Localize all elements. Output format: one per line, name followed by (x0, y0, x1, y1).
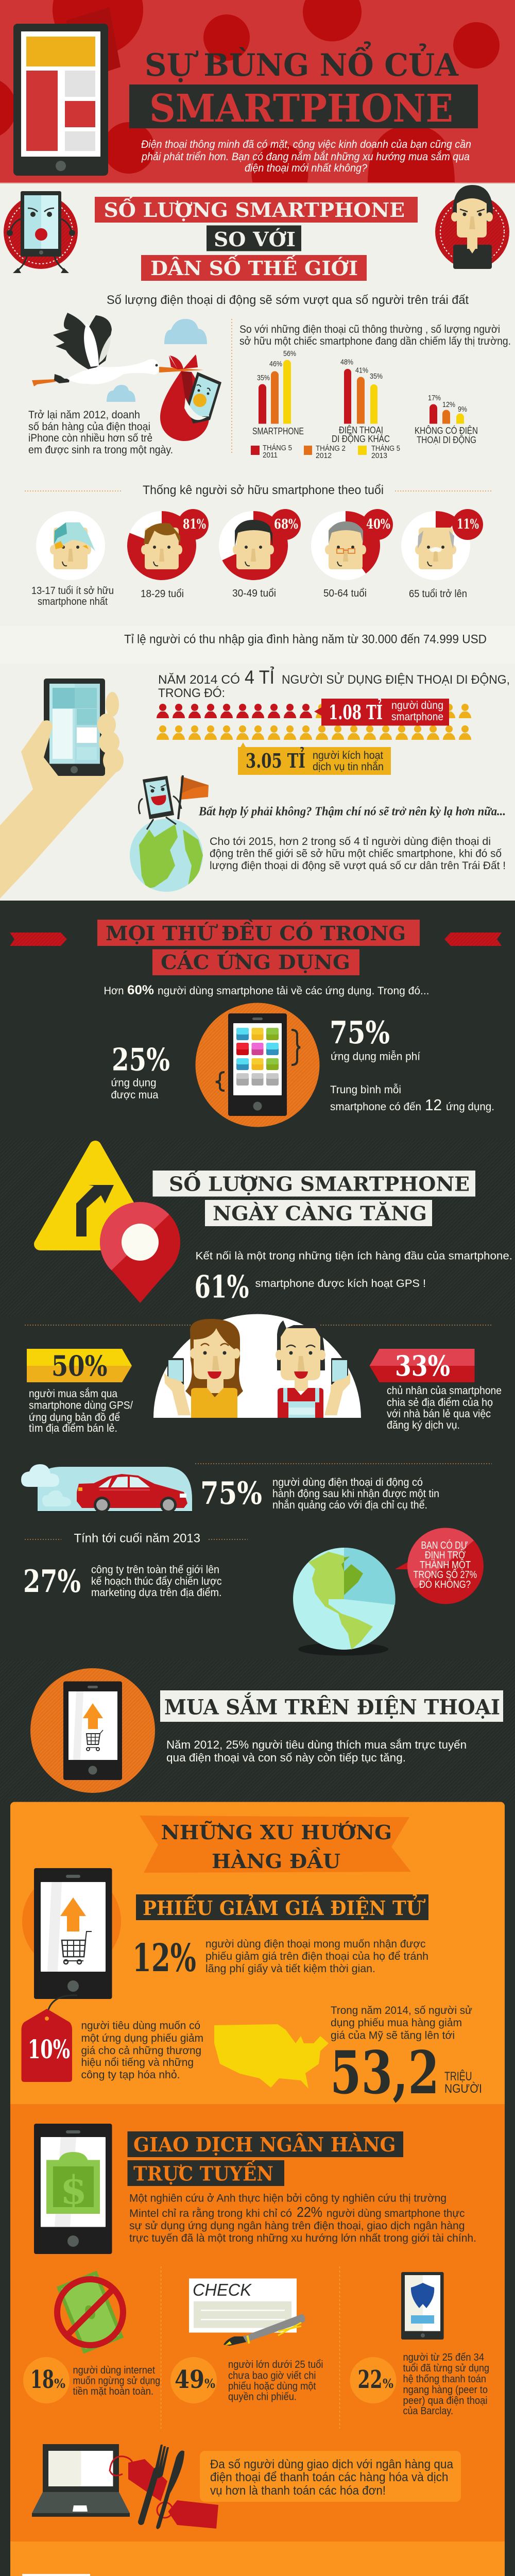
stat: 18 percent internet: 18 (30, 2365, 54, 2394)
stat: 22 percent peer to peer: tuổi đã từng sử dụng (403, 2363, 489, 2374)
icon: cheque and pen: CHECK (193, 2280, 252, 2299)
stat: 53.2 million: 53,2 (330, 2038, 439, 2107)
callout: pay for goods: Đa số người dùng giao dịch với ngân hàng qua (210, 2458, 454, 2471)
callout: 1.08 billion (314, 699, 449, 725)
age 65+: 11% (401, 509, 483, 600)
stat: 25 percent: 25% (112, 1042, 170, 1078)
heading: online banking: GIAO DỊCH NGÂN HÀNG (133, 2133, 396, 2156)
age 18-29: 81% (127, 509, 209, 600)
text: mintel study: 22% (297, 2204, 322, 2220)
bar chart: phone ownership: 12% (442, 400, 455, 409)
stat: 12 percent: lãng phí giấy và tiết kiệm thời gian. (205, 1963, 375, 1975)
stat: 12 percent: người dùng điện thoại mong muốn nhận được (205, 1938, 425, 1950)
banner: top trends: HÀNG ĐẦU (212, 1848, 340, 1873)
icon: bag with baby phone (160, 354, 221, 441)
text: gps shoppers: tìm địa điểm bán lẻ. (29, 1422, 117, 1434)
icon: phone mascot on globe (130, 775, 209, 892)
heading: các ứng dụng: CÁC ỨNG DỤNG (161, 951, 350, 974)
flag: 33 percent (370, 1349, 475, 1382)
age 30-49: 68%: 68% (274, 517, 298, 532)
speech bubble: BẠN CÓ DỰ (421, 1539, 468, 1551)
icon: cloud small (107, 385, 135, 402)
bar chart: phone ownership: 48% (340, 358, 353, 367)
icon: hero phone (13, 24, 108, 176)
intro text: điện thoại mới nhất không? (245, 162, 367, 174)
flag: 50 percent: 50% (52, 1349, 107, 1382)
pictogram: people rows (157, 704, 471, 740)
panel: top trends (10, 1802, 505, 2576)
stat: 75 percent act (200, 1476, 439, 1512)
label: 50-64: 50-64 tuổi (323, 588, 367, 599)
text: coupon app: người tiêu dùng muốn có (81, 2020, 200, 2032)
text: mintel study: Một nghiên cứu ở Anh thực hiện bởi công ty nghiên cứu thị trường (129, 2193, 447, 2205)
title: SỰ BÙNG NỔ CỦA (145, 41, 459, 83)
text: 60 percent (104, 983, 430, 997)
heading: số lượng smartphone: SỐ LƯỢNG SMARTPHONE (104, 196, 405, 222)
panel: apps (10, 920, 502, 1127)
text: 2012 shopping: Năm 2012, 25% người tiêu dùng thích mua sắm trực tuyến (166, 1738, 467, 1751)
icon: cheque and pen (189, 2278, 305, 2346)
stat: 75 percent act: người dùng điện thoại di động có (272, 1477, 423, 1488)
text: 2014 coupon users: giá của Mỹ sẽ tăng lên tới (331, 2030, 455, 2041)
text: coupon app: một ứng dụng phiếu giảm (81, 2032, 203, 2044)
stat: 27 percent: 27% (23, 1564, 81, 1600)
text: location sharers: với nhà bán lẻ qua việc (387, 1408, 491, 1420)
stat: 61 percent: smartphone được kích hoạt GPS ! (255, 1278, 426, 1290)
icon: price tag 10 percent (22, 2009, 72, 2082)
text: 2012 shopping: qua điện thoại và con số này còn tiếp tục tăng. (166, 1751, 406, 1764)
icon: qr phone with card (22, 2574, 140, 2576)
flag: 33 percent: 33% (395, 1349, 450, 1382)
stat: 49 percent cheques: 49 (175, 2365, 204, 2394)
text: coupon app: công ty tạp hóa nhỏ. (81, 2069, 180, 2081)
text: mintel study: trực tuyến đã là một trong những xu hướng lớn nhất trong giới tài chính. (129, 2232, 476, 2244)
stat: 18 percent internet (23, 2357, 160, 2403)
stat: 22 percent peer to peer: ngang hàng (peer to (403, 2384, 488, 2396)
banner: top trends (140, 1816, 411, 1873)
heading: số lượng smartphone: SỐ LƯỢNG SMARTPHONE (169, 1170, 470, 1195)
text: mintel study: Mintel chỉ ra rằng trong khi chỉ có (129, 2208, 292, 2219)
text: iPhone vs births (28, 409, 173, 456)
text: 2015 paragraph: lượng điện thoại di động sẽ vượt quá số cư dân trên Trái Đất ! (210, 860, 506, 872)
icon: stork (32, 313, 203, 386)
stat: 75 percent act: nhắn quảng cáo với địa chỉ cụ thể. (272, 1499, 427, 1511)
age 18-29: 81%: 81% (183, 517, 206, 532)
callout: 1.08 billion: người dùng (391, 700, 443, 711)
text: smartphones taking over: So với những điện thoại cũ thông thường , số lượng người (239, 324, 500, 335)
stat: 25 percent: được mua (111, 1089, 159, 1101)
heading: mọi thứ: MỌI THỨ ĐỀU CÓ TRONG (106, 920, 406, 945)
stat: 18 percent internet: người dùng internet (73, 2365, 155, 2376)
text: 2015 paragraph: Cho tới 2015, hơn 2 trong số 4 tỉ người dùng điện thoại di (210, 836, 491, 848)
stat: 22 percent peer to peer: % (383, 2376, 393, 2391)
callout: 1.08 billion: smartphone (391, 711, 443, 723)
text: iPhone vs births: Trở lại năm 2012, doanh (28, 409, 140, 421)
stat: 25 percent: ứng dụng (111, 1077, 157, 1089)
bar chart: phone ownership: ĐIỆN THOẠI (339, 425, 383, 435)
stat: 22 percent peer to peer: hệ thống thanh toán (403, 2374, 486, 2385)
text: 4 billion heading: NĂM 2014 CÓ (158, 673, 240, 687)
text: odd callout: Bất hợp lý phải không? Thậm chí nó sẽ trở nên kỳ lạ hơn nữa... (198, 805, 506, 818)
bar chart: phone ownership: KHÔNG CÓ ĐIỆN (415, 425, 478, 436)
subheading: mobile phones vs people: Số lượng điện thoại di động sẽ sớm vượt qua số người trên trái đất (107, 293, 469, 307)
icon: cloud large (164, 319, 207, 344)
label: 18-29: 18-29 tuổi (141, 588, 184, 600)
text: iPhone vs births: em được sinh ra trong một ngày. (28, 444, 173, 456)
subheading: ownership by age: Thống kê người sở hữu smartphone theo tuổi (143, 483, 384, 497)
icon: banking phone: $ (60, 2167, 87, 2213)
text: 12 apps: ứng dụng. (446, 1101, 494, 1113)
illustration: car (21, 1464, 192, 1513)
icon: USA map (214, 2024, 329, 2089)
stat: 75 percent (330, 1015, 420, 1062)
text: location sharers (387, 1385, 502, 1431)
bar chart: phone ownership: 9% (458, 405, 467, 414)
stat: 22 percent peer to peer (350, 2352, 489, 2417)
ribbon left (10, 933, 67, 946)
stat: 49 percent cheques (170, 2357, 323, 2403)
icon: road sign (40, 1147, 150, 1244)
label: 13-17: 13-17 tuổi ít sở hữu (31, 585, 114, 597)
stat: 75 percent: ứng dụng miễn phí (331, 1051, 420, 1062)
text: 2014 coupon users: dụng phiếu mua hàng giảm (331, 2017, 462, 2029)
icon: angry phone mascot (4, 191, 78, 273)
text: gps shoppers (29, 1388, 133, 1434)
stat: 75 percent act: hành động sau khi nhận được một tin (272, 1488, 439, 1500)
banner: top trends: NHỮNG XU HƯỚNG (161, 1821, 392, 1844)
text: location sharers: chủ nhân của smartphone (387, 1385, 502, 1397)
bar chart: phone ownership: SMARTPHONE (252, 426, 304, 436)
speech bubble: TRONG SỐ 27% (413, 1568, 477, 1581)
icon: phone with apps (196, 1003, 319, 1127)
subheading: end of 2013: Tính tới cuối năm 2013 (74, 1532, 200, 1546)
panel: mobile shopping (0, 1659, 515, 1802)
stat: 12 percent (132, 1936, 428, 1980)
stat: 22 percent peer to peer: người từ 25 đến 34 (403, 2352, 484, 2363)
icon: hand holding phone (0, 679, 124, 899)
stat: 22 percent peer to peer: peer) qua điện thoại (403, 2395, 487, 2406)
heading: so với: SO VỚI (214, 228, 296, 251)
stat: 75 percent: 75% (330, 1015, 390, 1051)
stat: 27 percent: marketing dựa trên địa điểm. (91, 1587, 221, 1599)
stat: 49 percent cheques: % (204, 2376, 215, 2391)
stat: 18 percent internet: % (54, 2376, 65, 2391)
heading: mua sắm: MUA SẮM TRÊN ĐIỆN THOẠI (164, 1693, 500, 1720)
label: 13-17 (31, 585, 114, 607)
text: 12 apps: Trung bình mỗi (330, 1084, 401, 1096)
text: mintel study (129, 2193, 476, 2244)
text: 2014 coupon users: Trong năm 2014, số người sử (331, 2005, 472, 2016)
stat: 22 percent peer to peer: của Barclay. (403, 2405, 453, 2417)
text: 2015 paragraph (210, 836, 506, 872)
age 13-17 (31, 511, 114, 607)
stat: 18 percent internet: tiền mặt hoàn toàn. (73, 2386, 153, 2397)
icon: laptop with tags and cutlery (32, 2444, 218, 2529)
text: gps shoppers: người mua sắm qua (29, 1388, 117, 1400)
text: 2014 coupon users (331, 2005, 472, 2041)
icon: phone with cart (30, 1668, 155, 1793)
callout: 3.05 billion: người kích hoạt (313, 750, 383, 761)
text: 4 billion heading: NGƯỜI SỬ DỤNG ĐIỆN THOẠI DI ĐỘNG, (282, 672, 510, 687)
age 50-64: 40% (311, 509, 393, 599)
text: 12 apps: smartphone có đến (330, 1101, 421, 1113)
stat: 49 percent cheques: phiếu hoặc dùng một (228, 2381, 316, 2392)
text: coupon app: hiệu nổi tiếng và những (81, 2057, 194, 2069)
text: 60 percent: 60% (127, 983, 154, 997)
stat: 12 percent: phiếu giảm giá trên điện thoại của họ để tránh (205, 1951, 428, 1962)
text: coupon app (81, 2020, 203, 2081)
stat: 61 percent: 61% (195, 1269, 249, 1306)
callout: pay for goods: điện thoại để thanh toán các hàng hóa và dịch (210, 2470, 448, 2484)
text: gps shoppers: smartphone dùng GPS/ (29, 1400, 133, 1412)
flag: 50 percent (27, 1349, 132, 1382)
heading: online banking: TRỰC TUYẾN (133, 2160, 273, 2185)
speech bubble: ĐỊNH TRỞ (425, 1549, 466, 1561)
heading: online banking (128, 2131, 403, 2186)
label: 13-17: smartphone nhất (38, 596, 108, 607)
icon: no cash (57, 2270, 124, 2354)
speech bubble: THÀNH MỘT (420, 1559, 471, 1571)
stat: 61 percent (195, 1269, 426, 1306)
text: connectivity: Kết nối là một trong những tiện ích hàng đầu của smartphone. (196, 1250, 512, 1262)
panel: hero (0, 0, 515, 183)
bar chart: phone ownership: 41% (355, 366, 368, 375)
chart legend (251, 444, 400, 460)
icon: barclays tablet (401, 2272, 444, 2340)
chart legend: THÁNG 2 (316, 444, 346, 453)
text: location sharers: chia sẻ địa điểm của họ (387, 1397, 493, 1409)
stat: 49 percent cheques: quyền chi phiếu. (228, 2392, 297, 2403)
stat: 49 percent cheques: người lớn dưới 25 tuổi (228, 2359, 323, 2370)
text: location sharers: đăng ký dịch vụ. (387, 1419, 460, 1431)
text: 12 apps: 12 (425, 1096, 442, 1114)
text: smartphones taking over (239, 324, 511, 347)
intro text: Điện thoại thông minh đã có mặt, công việc kinh doanh của bạn cũng cần (141, 139, 471, 150)
stat: 53.2 million: TRIỆU (444, 2070, 472, 2083)
icon: coupon phone (22, 1868, 121, 2017)
stat: 27 percent: công ty trên toàn thế giới lên (91, 1564, 219, 1576)
text: mintel study: sự sử dụng ứng dụng ngân hàng trên điện thoại, giao dịch ngân hàng (129, 2220, 465, 2232)
callout: 3.05 billion (238, 742, 391, 775)
stat: 25 percent (111, 1042, 170, 1101)
chart legend: 2011 (263, 451, 278, 460)
heading: coupons: PHIẾU GIẢM GIÁ ĐIỆN TỬ (143, 1894, 425, 1920)
icon: banking phone (34, 2124, 112, 2254)
callout: 3.05 billion: 3.05 TỈ (246, 748, 305, 772)
chart legend: THÁNG 5 (263, 444, 292, 452)
chart legend: THÁNG 5 (371, 444, 400, 453)
icon: map pin (100, 1202, 180, 1303)
panel: connectivity band (34, 1141, 511, 1303)
title bar: smartphone: SMARTPHONE (149, 87, 453, 131)
stat: 22 percent peer to peer: 22 (357, 2365, 382, 2394)
bar chart: phone ownership: 17% (428, 394, 441, 402)
bar chart: phone ownership: 35% (370, 372, 383, 381)
chart legend: 2012 (316, 451, 332, 460)
text: 60 percent: Hơn (104, 985, 124, 997)
label: 65+: 65 tuổi trở lên (409, 588, 467, 600)
label: 30-49: 30-49 tuổi (232, 588, 276, 599)
stat: 27 percent (23, 1564, 221, 1600)
text: mintel study: người dùng smartphone thực (327, 2208, 465, 2219)
text: 60 percent: người dùng smartphone tải về các ứng dụng. Trong đó... (158, 985, 430, 997)
bar chart: phone ownership: 46% (269, 360, 282, 368)
age 65+: 11%: 11% (457, 517, 479, 532)
text: 2012 shopping (166, 1738, 467, 1764)
text: 4 billion heading: TRONG ĐÓ: (158, 686, 225, 700)
stat: 18 percent internet: muốn ngừng sử dụng (73, 2375, 160, 2386)
illustration: woman and man with phones (153, 1314, 361, 1418)
bar chart: phone ownership: DI ĐỘNG KHÁC (332, 433, 390, 444)
intro text (141, 139, 471, 174)
callout: pay for goods (200, 2451, 461, 2502)
speech bubble: ĐÓ KHÔNG? (419, 1579, 471, 1590)
icon: angry man (435, 185, 509, 269)
text: gps shoppers: ứng dụng bản đồ để (29, 1412, 120, 1423)
stat: 27 percent: kế hoạch thúc đẩy chiến lược (91, 1575, 221, 1587)
bar chart: phone ownership (252, 349, 478, 445)
text: iPhone vs births: iPhone còn nhiều hơn số trẻ (28, 432, 152, 444)
bar chart: phone ownership: 56% (283, 349, 296, 358)
icon: globe (293, 1548, 396, 1656)
stat: 12 percent: 12% (132, 1936, 196, 1980)
bar chart: phone ownership: 35% (257, 374, 270, 382)
intro text: phải phát triển hơn. Bạn có đang nắm bắt những xu hướng mua sắm qua (141, 151, 470, 163)
text: 4 billion heading (158, 667, 510, 700)
callout: 3.05 billion: dịch vụ tin nhắn (313, 761, 384, 773)
stat: 49 percent cheques: chưa bao giờ viết chi (228, 2370, 316, 2381)
age 50-64: 40%: 40% (366, 517, 390, 532)
speech bubble (395, 1520, 484, 1604)
heading: dân số thế giới: DÂN SỐ THẾ GIỚI (150, 255, 358, 280)
age 30-49: 68% (219, 509, 301, 599)
text: 2015 paragraph: động trên thế giới sẽ sở hữu một chiếc smartphone, khi đó số (210, 848, 502, 859)
text: iPhone vs births: số bán hàng của điện thoại (28, 421, 150, 433)
callout: 1.08 billion: 1.08 TỈ (329, 699, 383, 724)
bar chart: phone ownership: THOẠI DI ĐỘNG (417, 434, 476, 445)
heading: ngày càng tăng: NGÀY CÀNG TĂNG (213, 1202, 427, 1225)
panel: smartphones vs world population (0, 183, 515, 901)
text: coupon app: giá cho cả những thương (81, 2045, 201, 2057)
stat: 75 percent act: 75% (200, 1476, 262, 1512)
callout: pay for goods: vụ hơn là thanh toán các hóa đơn! (210, 2484, 386, 2498)
stat: 53.2 million: NGƯỜI (444, 2082, 482, 2096)
icon: price tag 10 percent: 10% (28, 2034, 70, 2064)
ribbon right (444, 933, 502, 946)
text: 4 billion heading: 4 TỈ (245, 667, 274, 688)
text: income band: Tỉ lệ người có thu nhập gia đình hàng năm từ 30.000 đến 74.999 USD (124, 633, 487, 647)
text: 12 apps (330, 1084, 494, 1114)
chart legend: 2013 (371, 451, 387, 460)
